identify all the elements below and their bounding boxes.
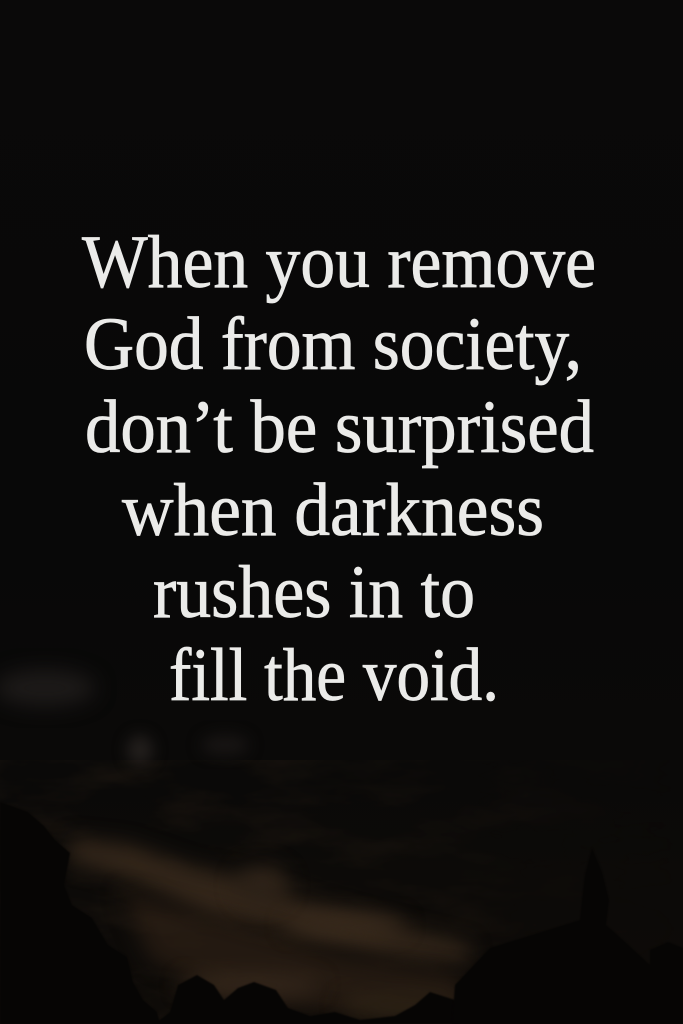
line 6: fill the void. (169, 634, 499, 717)
quote text (82, 221, 596, 717)
line 2: God from society, (84, 303, 582, 386)
storm clouds (0, 668, 474, 1020)
line 4: when darkness (122, 469, 544, 552)
line 3: don’t be surprised (85, 386, 594, 469)
church silhouette (452, 848, 683, 1024)
line 5: rushes in to (153, 551, 475, 634)
line 1: When you remove (82, 221, 596, 304)
trees silhouette (0, 802, 460, 1024)
